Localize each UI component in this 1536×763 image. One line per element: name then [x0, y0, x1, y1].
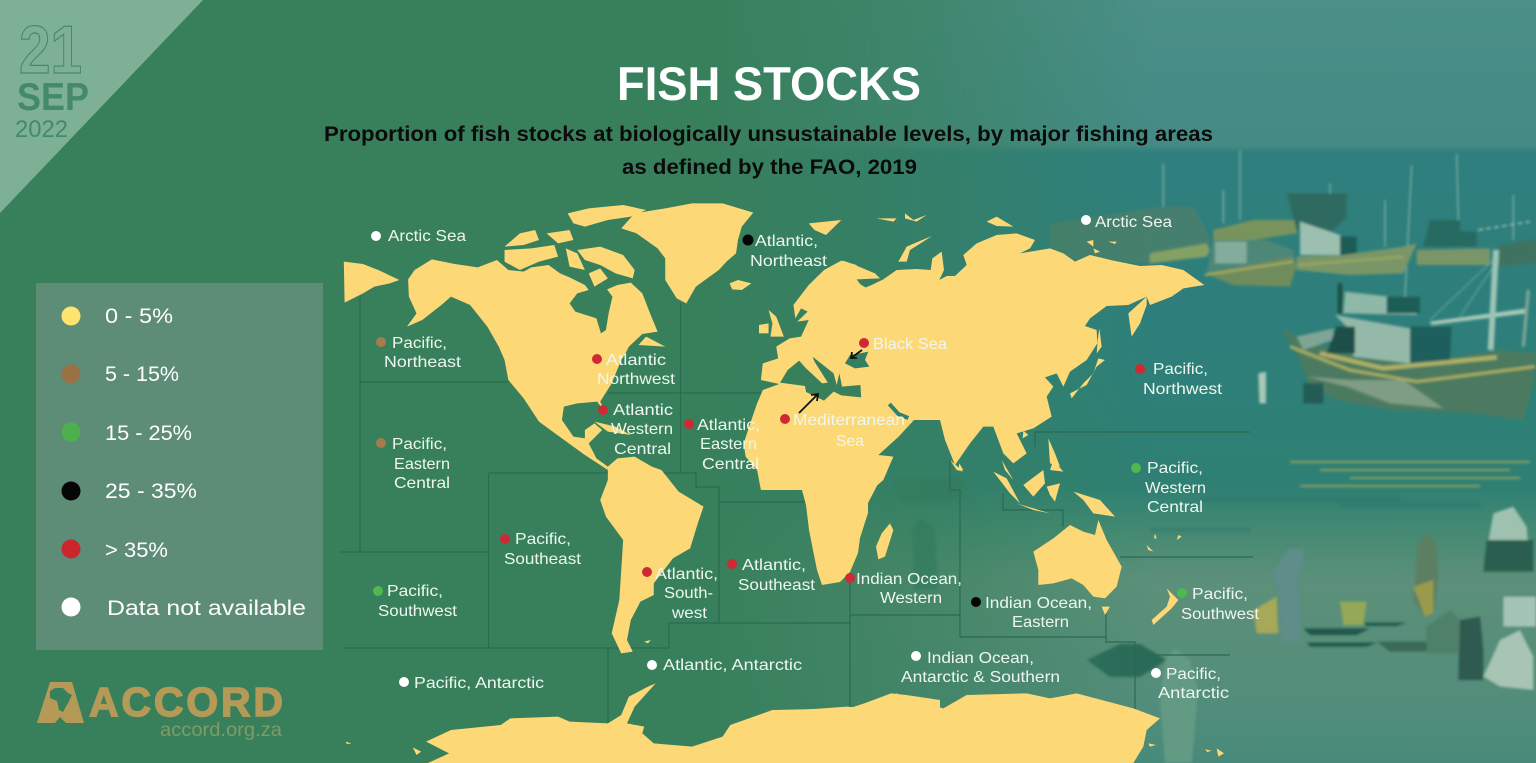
subantarctic islands	[1148, 743, 1224, 757]
label: atlantic southeast: Southeast	[738, 577, 816, 594]
label: pacific southwest east: Southwest	[1181, 606, 1260, 623]
legend: data not available: Data not available	[107, 597, 306, 620]
mediterranean sea	[780, 357, 861, 401]
label: pacific southwest west: Pacific,	[387, 583, 443, 600]
label: indian ocean western: Western	[880, 590, 942, 607]
label: pacific southeast	[500, 531, 582, 568]
label: mediterranean sea: Mediterranean	[793, 412, 905, 429]
label: atlantic northeast: Northeast	[750, 253, 828, 270]
fishing area boundary lines	[340, 297, 1253, 723]
japan, taiwan, sri lanka, philippines	[958, 358, 1105, 470]
label: pacific eastern central: Pacific,	[392, 436, 447, 453]
persian gulf	[889, 404, 908, 418]
label: pacific eastern central: Eastern	[394, 456, 450, 473]
legend panel	[36, 283, 323, 650]
label: pacific western central	[1131, 460, 1206, 516]
label: atlantic northwest	[592, 352, 676, 388]
chukotka west of date line	[344, 262, 399, 303]
arrow: mediterranean sea	[799, 394, 818, 413]
label: atlantic southwest: west	[671, 605, 708, 622]
legend: over 35%	[62, 539, 168, 562]
corner triangle date badge	[0, 0, 203, 213]
logo url: accord.org.za	[160, 720, 282, 741]
label: atlantic southwest	[642, 566, 718, 622]
europe and north africa	[744, 261, 937, 490]
label: indian ocean antarctic and southern	[901, 650, 1060, 686]
label: pacific eastern central	[376, 436, 450, 492]
label: atlantic northwest: Northwest	[597, 371, 676, 388]
subtitle: Proportion of fish stocks at biologically unsustainable levels, by major fishing areas	[324, 123, 1213, 146]
legend: 5 - 15%	[62, 363, 179, 386]
world map	[340, 203, 1253, 763]
label: arctic sea east: Arctic Sea	[1095, 214, 1172, 231]
arctic islands	[505, 205, 646, 287]
madagascar	[876, 523, 893, 559]
back row boats	[1050, 150, 1536, 297]
label: atlantic southwest: South-	[664, 585, 713, 602]
subtitle: as defined by the FAO, 2019	[622, 156, 917, 179]
label: pacific southwest east	[1177, 586, 1260, 623]
label: atlantic antarctic: Atlantic, Antarctic	[663, 657, 802, 674]
label: atlantic western central: Western	[611, 421, 673, 438]
label: indian ocean eastern: Eastern	[1012, 614, 1069, 631]
label: pacific northeast	[376, 335, 462, 371]
logo wordmark: ACCORD	[89, 679, 283, 725]
small southern islands	[346, 640, 651, 755]
label: pacific southeast: Southeast	[504, 551, 582, 568]
date: month: SEP	[17, 76, 89, 119]
southern africa	[757, 455, 893, 585]
label: atlantic northeast	[742, 233, 828, 270]
beach figures	[1253, 507, 1536, 690]
label: pacific western central: Western	[1145, 480, 1206, 497]
label: pacific southwest west	[373, 583, 458, 620]
legend: 0 - 5%	[62, 305, 173, 328]
southeast asia islands	[950, 460, 1182, 552]
background photo: fishing boats and beach	[810, 0, 1536, 763]
logo: accord	[37, 679, 283, 741]
label: atlantic eastern central: Eastern	[700, 436, 757, 453]
label: black sea: Black Sea	[873, 336, 947, 353]
arctic russian islands	[877, 213, 1117, 262]
label: pacific southwest west: Southwest	[378, 603, 458, 620]
label: atlantic northwest: Atlantic	[606, 352, 666, 369]
label: pacific western central: Pacific,	[1147, 460, 1203, 477]
label: atlantic southeast: Atlantic,	[742, 557, 806, 574]
antarctica east	[800, 693, 1160, 763]
label: atlantic eastern central: Atlantic,	[697, 417, 760, 434]
label: pacific southeast: Pacific,	[515, 531, 571, 548]
legend: over 35%: > 35%	[105, 539, 168, 562]
label: indian ocean antarctic and southern: Indian Ocean,	[927, 650, 1034, 667]
label: atlantic eastern central: Central	[702, 456, 759, 473]
north atlantic islands	[594, 220, 841, 435]
label: indian ocean eastern	[971, 595, 1092, 631]
label: atlantic southeast	[727, 557, 816, 594]
black sea	[845, 352, 869, 368]
label: pacific eastern central: Central	[394, 475, 450, 492]
label: pacific antarctic west: Pacific, Antarctic	[414, 675, 544, 692]
legend: 15 - 25%	[62, 422, 192, 445]
antarctica west and peninsula	[426, 683, 940, 763]
continent: north america	[407, 259, 658, 470]
label: mediterranean sea	[780, 412, 905, 450]
kamchatka and sakhalin	[1097, 297, 1147, 353]
label: atlantic northeast: Atlantic,	[755, 233, 818, 250]
label: indian ocean western	[845, 571, 962, 607]
label: indian ocean western: Indian Ocean,	[856, 571, 962, 588]
label: pacific northeast: Pacific,	[392, 335, 447, 352]
label: pacific northeast: Northeast	[384, 354, 462, 371]
foreground boat	[1258, 250, 1536, 420]
australia	[1033, 520, 1122, 598]
continent: asia	[843, 233, 1204, 465]
legend: 25 - 35%: 25 - 35%	[105, 480, 197, 503]
label: atlantic western central	[598, 402, 673, 458]
label: pacific southwest east: Pacific,	[1192, 586, 1248, 603]
tasmania and new zealand	[1102, 588, 1178, 625]
label: pacific western central: Central	[1147, 499, 1203, 516]
label: pacific northwest: Northwest	[1143, 381, 1223, 398]
subtitle	[324, 123, 1213, 179]
label: atlantic western central: Atlantic	[613, 402, 673, 419]
beach figures near map	[914, 536, 1198, 763]
label: indian ocean eastern: Indian Ocean,	[985, 595, 1092, 612]
south america	[600, 457, 704, 653]
title: FISH STOCKS	[617, 57, 921, 110]
legend: 5 - 15%: 5 - 15%	[105, 363, 179, 386]
legend: 0 - 5%: 0 - 5%	[105, 305, 173, 328]
label: pacific antarctic east	[1151, 666, 1229, 702]
legend: data not available	[62, 597, 306, 620]
label: pacific northwest	[1135, 361, 1223, 398]
greenland	[621, 203, 753, 303]
label: indian ocean antarctic and southern: Antarctic & Southern	[901, 669, 1060, 686]
label: pacific antarctic east: Antarctic	[1158, 685, 1229, 702]
label: atlantic western central: Central	[614, 441, 671, 458]
date: day: 21	[19, 12, 82, 88]
label: atlantic southwest: Atlantic,	[655, 566, 718, 583]
arrow: black sea	[851, 350, 862, 358]
label: pacific antarctic east: Pacific,	[1166, 666, 1221, 683]
label: atlantic eastern central	[684, 417, 760, 473]
label: pacific northwest: Pacific,	[1153, 361, 1208, 378]
legend: 15 - 25%: 15 - 25%	[105, 422, 192, 445]
label: arctic sea west: Arctic Sea	[388, 228, 466, 245]
label: mediterranean sea: Sea	[836, 433, 864, 450]
date: year: 2022	[15, 116, 68, 143]
legend: 25 - 35%	[62, 480, 197, 503]
logo icon with africa silhouette	[37, 682, 84, 723]
